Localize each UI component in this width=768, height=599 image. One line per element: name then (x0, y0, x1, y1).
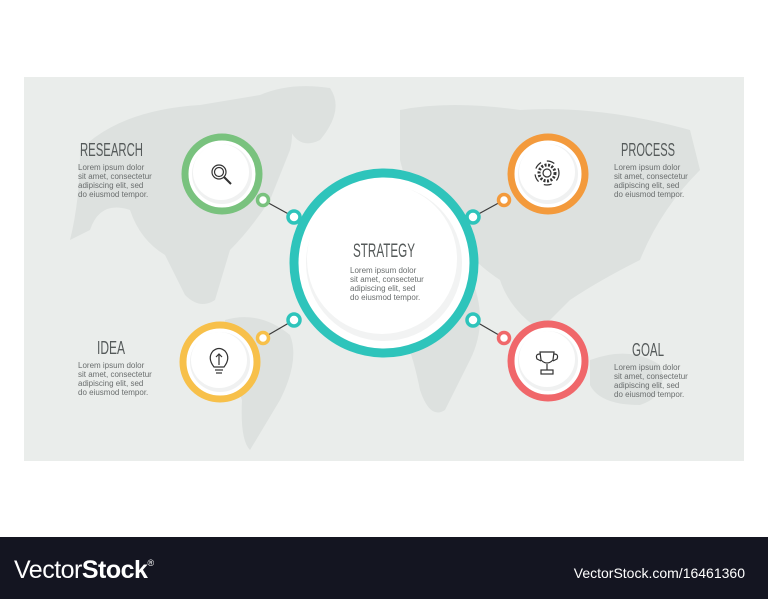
text: research: Lorem ipsum dolor (78, 163, 145, 172)
icon: gear (535, 161, 559, 185)
text: goal: sit amet, consectetur (614, 372, 688, 381)
central circle: strategy: Lorem ipsum dolor (350, 266, 417, 275)
footer bar: ® (147, 558, 154, 568)
icon: magnifier (212, 165, 231, 184)
text: research: sit amet, consectetur (78, 172, 152, 181)
text: goal (614, 340, 688, 399)
central circle: strategy: STRATEGY (353, 241, 415, 262)
text: research: do eiusmod tempor. (78, 190, 148, 199)
central circle: strategy: adipiscing elit, sed (350, 284, 415, 293)
text: research: RESEARCH (80, 140, 143, 160)
footer bar: VectorStock (14, 556, 147, 584)
text: idea: adipiscing elit, sed (78, 379, 143, 388)
node: idea (183, 325, 268, 399)
text: idea: sit amet, consectetur (78, 370, 152, 379)
text: process: Lorem ipsum dolor (614, 163, 681, 172)
central circle: strategy (288, 173, 479, 353)
text: idea: IDEA (97, 338, 125, 358)
connector lines (263, 200, 504, 338)
icon: trophy (536, 352, 558, 374)
node: process (498, 137, 585, 211)
text: process: sit amet, consectetur (614, 172, 688, 181)
world map (70, 86, 700, 450)
text: process (614, 140, 688, 199)
text: idea: Lorem ipsum dolor (78, 361, 145, 370)
text: goal: adipiscing elit, sed (614, 381, 679, 390)
footer bar: VectorStock.com/16461360 (574, 565, 745, 581)
text: goal: Lorem ipsum dolor (614, 363, 681, 372)
footer bar (0, 537, 768, 599)
text: idea (78, 338, 152, 397)
text: process: do eiusmod tempor. (614, 190, 684, 199)
text: process: PROCESS (621, 140, 675, 160)
text: idea: do eiusmod tempor. (78, 388, 148, 397)
node: research (185, 137, 268, 211)
text: research (78, 140, 152, 199)
text: goal: GOAL (632, 340, 664, 360)
central circle: strategy: sit amet, consectetur (350, 275, 424, 284)
text: goal: do eiusmod tempor. (614, 390, 684, 399)
background panel (24, 77, 744, 461)
node: goal (498, 324, 585, 398)
text: process: adipiscing elit, sed (614, 181, 679, 190)
central circle: strategy: do eiusmod tempor. (350, 293, 420, 302)
icon: bulb (210, 348, 228, 373)
text: research: adipiscing elit, sed (78, 181, 143, 190)
